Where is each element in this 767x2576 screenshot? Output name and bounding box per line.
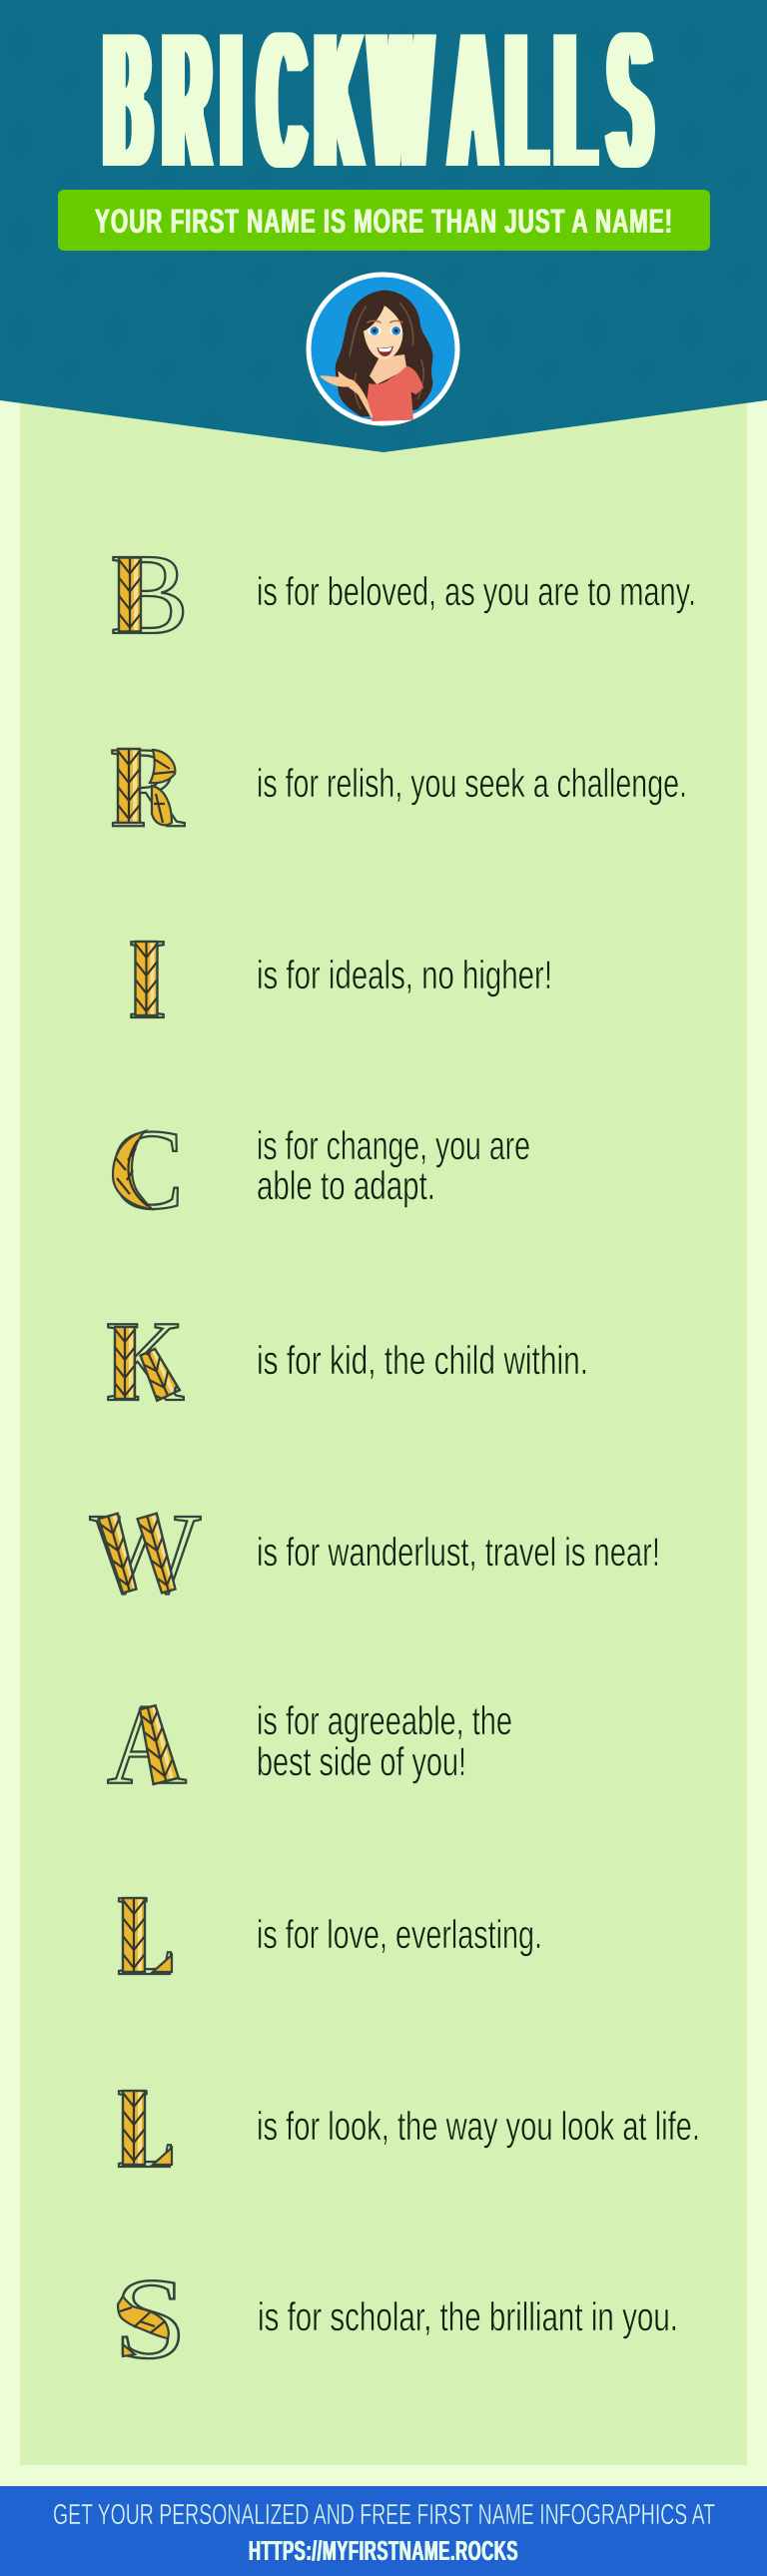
row: letter R	[109, 724, 687, 852]
icon: wheat letter B: B	[110, 531, 189, 659]
icon: wheat letter L: L	[116, 1872, 177, 2000]
subtitle banner	[58, 190, 710, 251]
icon: wheat letter C: C	[110, 1106, 184, 1234]
row: second letter L	[116, 2065, 700, 2193]
text: K line: is for kid, the child within.	[257, 1339, 588, 1383]
row: letter A	[107, 1681, 512, 1809]
text: C lines: is for change, you are	[257, 1124, 530, 1168]
icon: wheat letter L: L	[116, 2065, 177, 2193]
icon: wheat letter W: W	[90, 1491, 202, 1618]
panel: letters background	[20, 379, 747, 2465]
text: C lines: able to adapt.	[257, 1164, 435, 1208]
row: letter K	[105, 1298, 588, 1426]
icon: wheat letter K: K	[105, 1298, 185, 1426]
text: A lines: is for agreeable, the	[257, 1699, 512, 1743]
icon: wheat letter S: S	[114, 2255, 187, 2383]
text: C lines	[257, 1124, 530, 1208]
icon: wheat letter A: A	[107, 1681, 187, 1809]
text: A lines: best side of you!	[257, 1740, 466, 1784]
row: letter L	[116, 1872, 542, 2000]
footer link: HTTPS://MYFIRSTNAME.ROCKS	[249, 2535, 518, 2566]
icon: wheat letter I: I	[127, 916, 168, 1043]
row: letter W	[90, 1491, 660, 1618]
icon: woman avatar	[309, 275, 457, 423]
icon: wheat letter R: R	[109, 724, 186, 852]
row: letter I	[127, 916, 552, 1043]
footer	[0, 2486, 767, 2576]
text: L line: is for love, everlasting.	[257, 1913, 542, 1957]
text: A lines	[257, 1699, 512, 1784]
row: letter B	[110, 531, 696, 659]
row: letter S	[114, 2255, 678, 2383]
panel: header	[0, 0, 767, 452]
row: letter C	[110, 1106, 530, 1234]
text: I line: is for ideals, no higher!	[257, 954, 552, 997]
